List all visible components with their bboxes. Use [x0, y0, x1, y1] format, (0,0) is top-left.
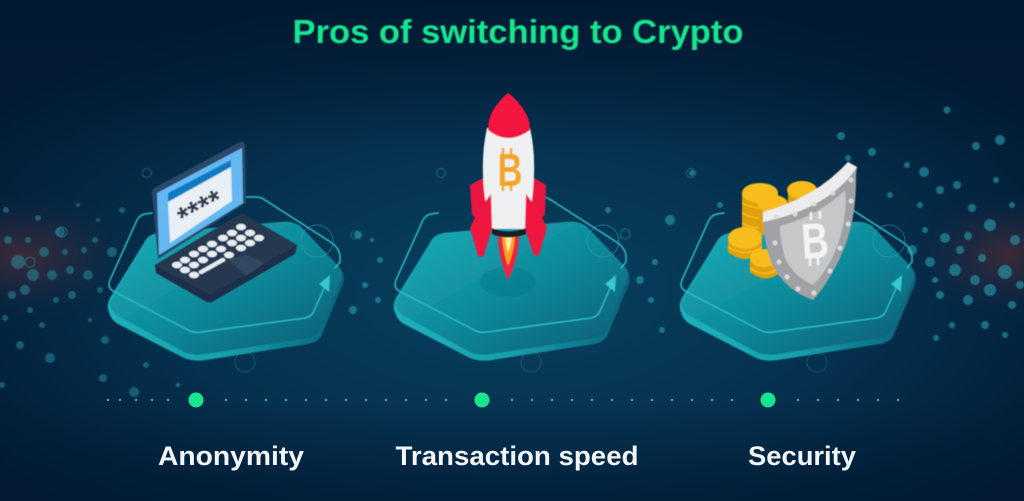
icon: shield with coins	[728, 162, 857, 300]
icon: laptop	[152, 142, 297, 302]
label: anonymity: Anonymity	[158, 441, 304, 471]
icon: rocket	[470, 93, 547, 297]
label: security: Security	[748, 441, 856, 471]
platform: anonymity	[108, 197, 344, 372]
title: Pros of switching to Crypto	[292, 13, 744, 50]
bitcoin mark on shield: B	[800, 212, 830, 270]
password stars: ****	[172, 183, 229, 235]
platform: security	[680, 197, 916, 372]
gold coins	[728, 181, 817, 279]
label: transaction speed: Transaction speed	[396, 441, 638, 471]
platform: transaction speed	[394, 197, 630, 372]
bitcoin mark: B	[498, 144, 522, 196]
timeline dots	[107, 392, 899, 408]
background particles	[0, 106, 1024, 397]
